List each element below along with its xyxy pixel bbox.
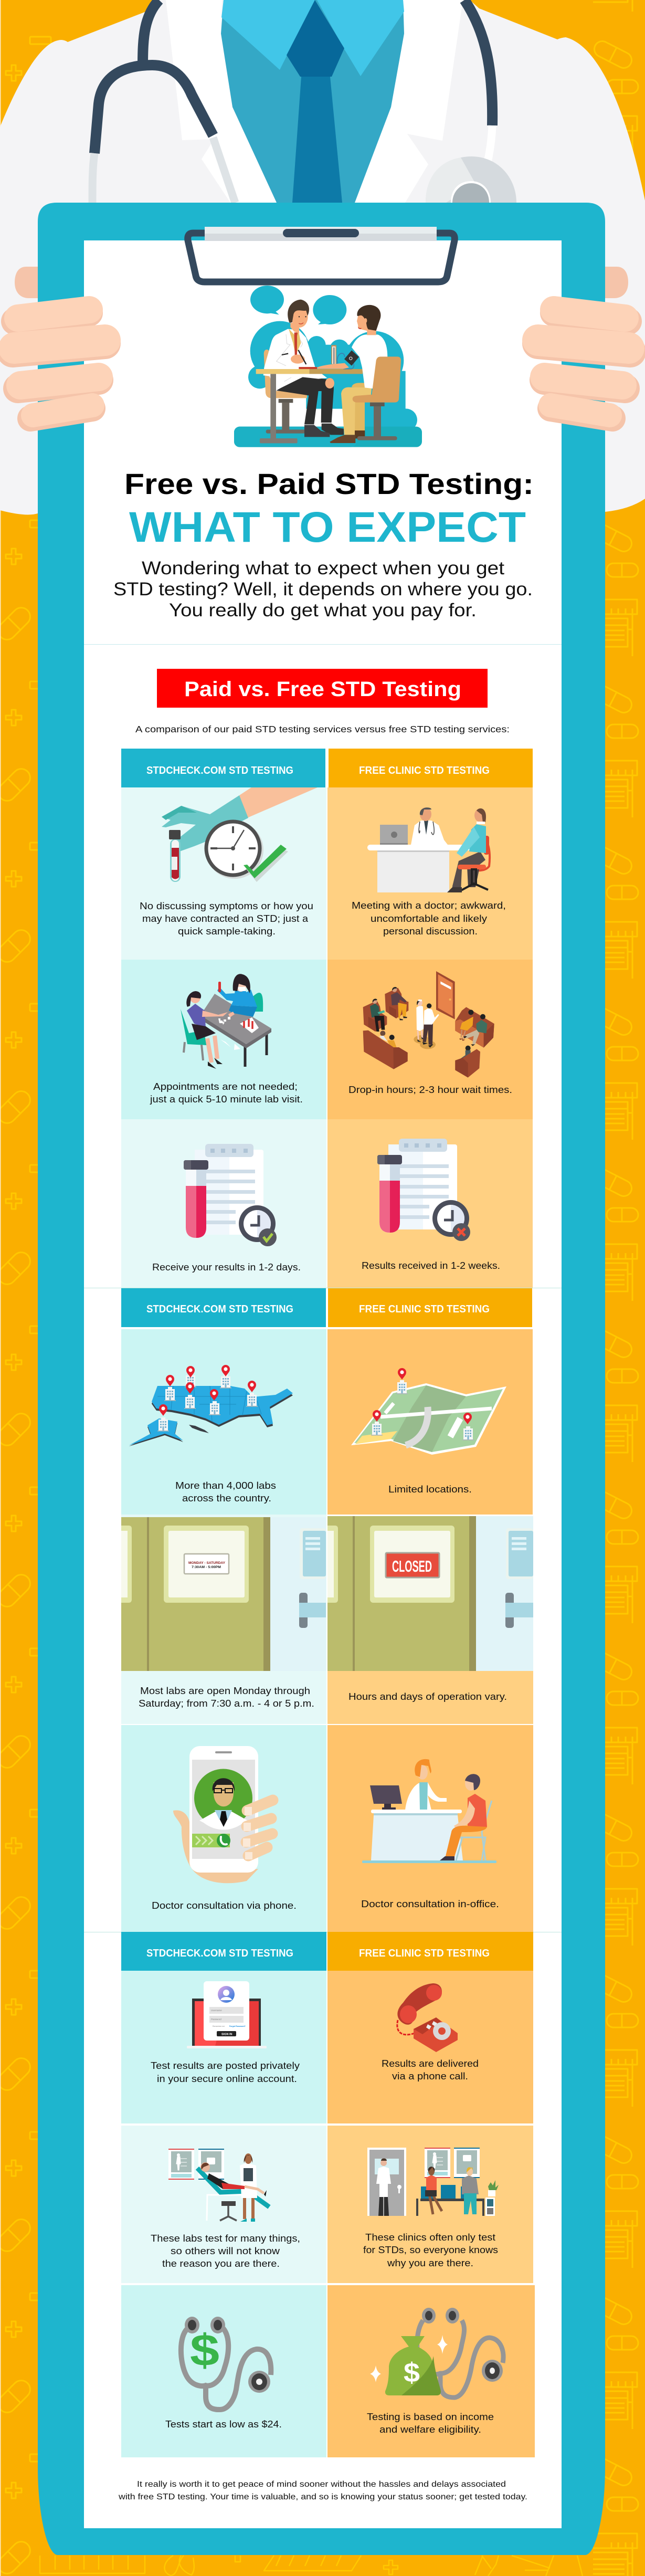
section banner bbox=[157, 669, 488, 708]
panel: quick sample-taking: may have contracted an STD; just a bbox=[142, 913, 309, 924]
panel: results via phone call bbox=[327, 1971, 533, 2123]
panel: no appointments bbox=[121, 960, 326, 1119]
table 3 header: free clinic bbox=[327, 1932, 533, 1971]
panel: results in 1-2 days: Receive your results in 1-2 days. bbox=[152, 1262, 301, 1273]
panel: clinics only test for STDs: for STDs, so everyone knows bbox=[363, 2245, 498, 2255]
icon: laptop with secure sign-in card: Forgot Password? bbox=[229, 2025, 246, 2027]
icon: gloved hand with tube, clock and check bbox=[162, 787, 318, 882]
intro text: You really do get what you pay for. bbox=[169, 600, 477, 621]
closing text bbox=[118, 2480, 527, 2501]
left armchair with man and tablet bbox=[363, 998, 387, 1032]
panel: tests start at $24 bbox=[121, 2285, 326, 2457]
lower armchair with visitor bbox=[455, 1046, 480, 1078]
panel: limited locations bbox=[327, 1329, 533, 1515]
icon: stethoscope with dollar sign bbox=[181, 2317, 271, 2410]
icon: money bag with stethoscope bbox=[370, 2308, 503, 2398]
panel: quick sample-taking: quick sample-taking. bbox=[178, 926, 276, 937]
panel: clinics only test for STDs bbox=[327, 2126, 533, 2283]
teal cloud backdrop bbox=[248, 286, 417, 432]
icon: doctor and patient at office desk bbox=[362, 1759, 496, 1863]
title line 1: Free vs. Paid STD Testing: bbox=[124, 467, 534, 500]
panel: clinics only test for STDs: why you are there. bbox=[387, 2258, 473, 2268]
title bbox=[124, 467, 534, 551]
table 3 header: STDCheck bbox=[121, 1932, 326, 1971]
panel: results online bbox=[121, 1971, 326, 2123]
closing text: with free STD testing. Your time is valuable, and so is knowing your status sooner; get tested today. bbox=[118, 2493, 527, 2501]
panel: clinics only test for STDs: These clinics often only test bbox=[365, 2232, 495, 2243]
comparison intro sentence: A comparison of our paid STD testing services versus free STD testing services: bbox=[135, 724, 510, 734]
icon: laptop with secure sign-in card: Password bbox=[211, 2018, 221, 2021]
lapels bbox=[166, 0, 463, 203]
panel: tests start at $24: Tests start as low as $24. bbox=[165, 2419, 282, 2430]
panel: income-based testing: and welfare eligibility. bbox=[379, 2424, 481, 2435]
closing text: It really is worth it to get peace of mind sooner without the hassles and delays associated bbox=[137, 2480, 506, 2489]
table bbox=[256, 367, 363, 443]
icon: laptop with secure sign-in card bbox=[187, 1981, 267, 2048]
icon: folded map with pins bbox=[351, 1368, 506, 1455]
panel: income-based testing: Testing is based on income bbox=[367, 2412, 494, 2422]
background icons below clipboard bbox=[40, 2556, 583, 2576]
icon: US map with pins and labs bbox=[129, 1365, 293, 1446]
table 1 header: free clinic bbox=[329, 749, 533, 787]
blood pressure gauge bbox=[331, 345, 354, 369]
panel: labs test for many things: so others will not know bbox=[171, 2246, 280, 2256]
icon: doctor at desk with patient bbox=[367, 807, 490, 892]
panel: drop-in hours: Drop-in hours; 2-3 hour wait times. bbox=[348, 1085, 512, 1095]
panel: hours vary: Hours and days of operation vary. bbox=[348, 1691, 507, 1702]
paper bbox=[84, 240, 562, 2528]
icon: clinic door with closed sign bbox=[327, 1516, 533, 1671]
icon: laptop with secure sign-in card: SIGN IN bbox=[221, 2033, 232, 2036]
hero illustration: doctor measuring a patient's blood pressure bbox=[234, 286, 422, 447]
panel: doctor consultation via phone: Doctor consultation via phone. bbox=[152, 1900, 297, 1911]
shirt collar bbox=[221, 0, 404, 76]
icon: lab door with hours sign: 7:30AM - 5:00PM bbox=[192, 1566, 221, 1569]
patient figure bbox=[317, 305, 387, 443]
panel: results in 1-2 days bbox=[121, 1119, 326, 1288]
icon: lab report, tube and clock with cross bbox=[377, 1139, 470, 1241]
panel: doctor consultation in-office bbox=[327, 1725, 533, 1932]
icon: laptop with secure sign-in card: Username bbox=[211, 2009, 222, 2012]
icon: lab visit at table bbox=[181, 974, 271, 1069]
icon: hand holding phone with doctor call bbox=[173, 1746, 273, 1883]
icon: red rotary telephone bbox=[397, 1983, 458, 2052]
clip bbox=[188, 227, 454, 282]
icon: patient reclining beside nurse bbox=[168, 2149, 269, 2222]
panel: results online: Test results are posted privately bbox=[151, 2060, 300, 2071]
panel: results via phone call: via a phone call. bbox=[392, 2071, 468, 2081]
panel: limited locations: Limited locations. bbox=[388, 1484, 472, 1495]
panel: 4,000 labs: across the country. bbox=[182, 1493, 271, 1503]
intro text bbox=[113, 558, 533, 621]
left palm behind clipboard bbox=[15, 267, 42, 298]
panel: drop-in hours bbox=[327, 960, 533, 1119]
panel: labs test for many things: the reason you are there. bbox=[162, 2258, 280, 2269]
table 3 header: free clinic: FREE CLINIC STD TESTING bbox=[359, 1948, 490, 1959]
upper armchair with man bbox=[385, 987, 408, 1020]
panel: hours vary bbox=[327, 1516, 533, 1724]
panel: lab hours: Most labs are open Monday through bbox=[140, 1686, 310, 1696]
left chair bbox=[264, 350, 307, 434]
panel: results online: in your secure online account. bbox=[157, 2074, 297, 2084]
man in white shirt bbox=[420, 1003, 439, 1049]
big sofa with two visitors bbox=[363, 1031, 408, 1069]
table 2 header: STDCheck bbox=[121, 1288, 326, 1327]
icon: money bag with stethoscope: $ bbox=[404, 2358, 420, 2388]
table 2 header: STDCheck: STDCHECK.COM STD TESTING bbox=[146, 1303, 293, 1315]
doctor: white coat, shirt, tie and stethoscope bbox=[0, 0, 645, 514]
icon: laptop with secure sign-in card: Remember me bbox=[213, 2025, 225, 2027]
tie knot bbox=[287, 0, 344, 77]
table 3 header: STDCheck: STDCHECK.COM STD TESTING bbox=[146, 1948, 293, 1959]
table 2 header: free clinic: FREE CLINIC STD TESTING bbox=[359, 1303, 490, 1315]
door bbox=[436, 971, 455, 1019]
panel: lab hours: Saturday; from 7:30 a.m. - 4 or 5 p.m. bbox=[139, 1698, 314, 1709]
panel: lab hours bbox=[121, 1515, 326, 1724]
right chair bbox=[353, 356, 401, 440]
doctor figure bbox=[263, 300, 344, 437]
chest piece bbox=[426, 156, 516, 203]
title line 2: WHAT TO EXPECT bbox=[129, 503, 526, 551]
right hand fingers bbox=[538, 310, 630, 418]
panel: 4,000 labs bbox=[121, 1329, 326, 1515]
shirt bbox=[221, 0, 404, 203]
intro text: Wondering what to expect when you get bbox=[142, 558, 504, 579]
icon: lab door with hours sign bbox=[121, 1517, 326, 1671]
icon: stethoscope with dollar sign: $ bbox=[190, 2326, 219, 2375]
table 2 header: free clinic bbox=[328, 1288, 532, 1327]
icon: lab door with hours sign: MONDAY - SATURDAY bbox=[188, 1562, 225, 1565]
panel: no appointments: just a quick 5-10 minute lab visit. bbox=[150, 1094, 303, 1105]
stethoscope tubes bbox=[94, 0, 213, 153]
panel: doctor consultation via phone bbox=[121, 1725, 326, 1932]
panel: meeting with a doctor bbox=[327, 787, 533, 960]
right palm behind clipboard bbox=[601, 267, 628, 298]
table 1 header: STDCheck bbox=[121, 749, 325, 787]
panel: labs test for many things bbox=[121, 2126, 326, 2283]
table 1 header: free clinic: FREE CLINIC STD TESTING bbox=[359, 765, 490, 776]
table 1 header: STDCheck: STDCHECK.COM STD TESTING bbox=[146, 765, 293, 776]
panel: meeting with a doctor: Meeting with a doctor; awkward, bbox=[352, 900, 506, 911]
white coat bbox=[0, 0, 645, 514]
panel: doctor consultation in-office: Doctor consultation in-office. bbox=[361, 1899, 499, 1909]
panel: results in 1-2 weeks bbox=[327, 1119, 533, 1288]
icon: lab report, tube and clock with check bbox=[184, 1144, 277, 1246]
icon: clinic waiting area bbox=[367, 2148, 499, 2216]
panel: labs test for many things: These labs test for many things, bbox=[151, 2233, 300, 2244]
panel: results via phone call: Results are delivered bbox=[382, 2058, 479, 2069]
right sofa with couple bbox=[455, 1007, 494, 1048]
panel: meeting with a doctor: uncomfortable and likely bbox=[371, 913, 487, 924]
nurse bbox=[414, 999, 429, 1044]
left hand fingers bbox=[13, 310, 105, 418]
icon: clinic door with closed sign: CLOSED bbox=[392, 1557, 432, 1575]
panel: no appointments: Appointments are not needed; bbox=[153, 1081, 298, 1092]
panel: income-based testing bbox=[327, 2285, 535, 2457]
section banner: Paid vs. Free STD Testing bbox=[184, 678, 461, 701]
panel: results in 1-2 weeks: Results received in 1-2 weeks. bbox=[362, 1260, 500, 1271]
panel: meeting with a doctor: personal discussion. bbox=[383, 926, 478, 937]
panel: quick sample-taking bbox=[121, 787, 326, 960]
tie bbox=[292, 77, 342, 203]
panel: quick sample-taking: No discussing symptoms or how you bbox=[140, 901, 313, 911]
panel: 4,000 labs: More than 4,000 labs bbox=[175, 1480, 276, 1491]
intro text: STD testing? Well, it depends on where you go. bbox=[113, 579, 533, 600]
icon: crowded waiting room bbox=[363, 971, 494, 1078]
